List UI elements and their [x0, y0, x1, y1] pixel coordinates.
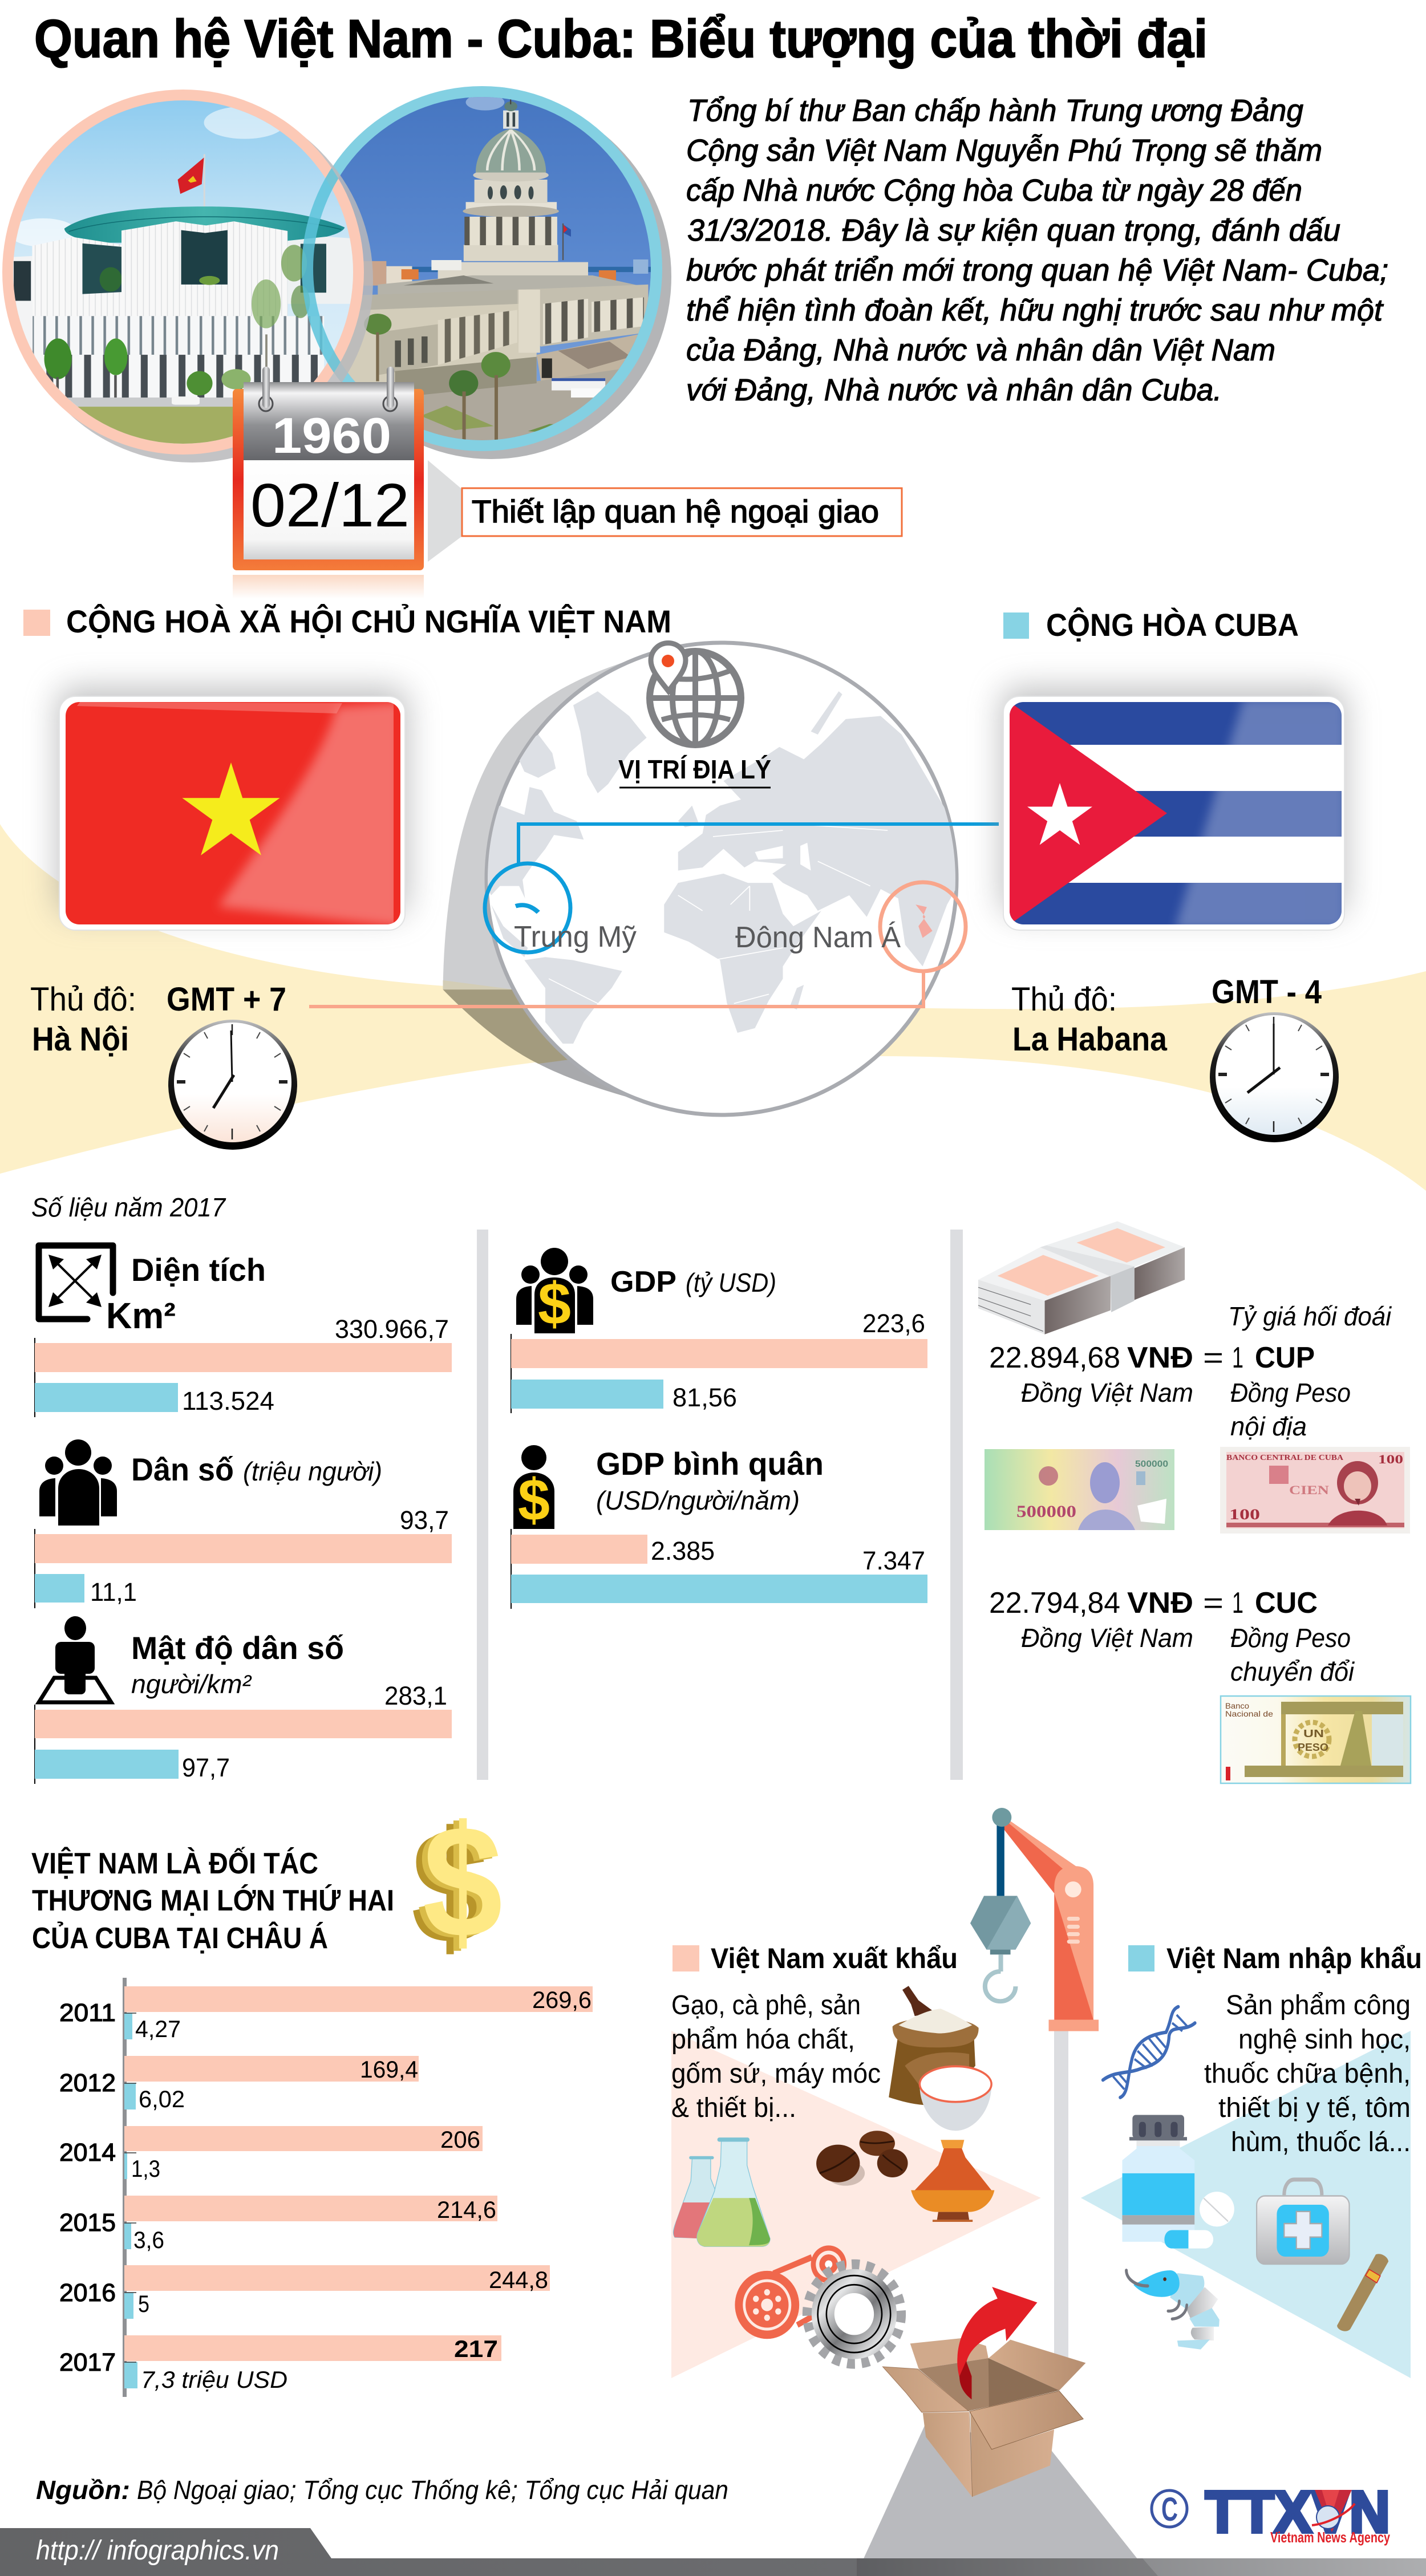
icon: rice sack [889, 1986, 979, 2106]
export text: Gạo, cà phê, sản [671, 1990, 861, 2021]
row 2016: 5 [138, 2290, 149, 2317]
icon: GDP person: $ [518, 1467, 550, 1534]
row 2015: 2015 [59, 2209, 116, 2237]
icon: gold dollar: $ [423, 1793, 503, 1971]
intro text: bước phát triển mới trong quan hệ Việt Nam- Cuba; [686, 253, 1388, 287]
panel: exchange rates [978, 1222, 1411, 1783]
row 2017: 7,3 triệu USD [141, 2366, 287, 2393]
rate: CUP: Đồng Peso [1230, 1378, 1351, 1407]
icon: GDP people: $ [538, 1271, 571, 1337]
intro text [686, 94, 1388, 407]
chart: population: 11,1 [90, 1577, 137, 1607]
chart: area: 330.966,7 [335, 1315, 449, 1344]
row 2015 [59, 2196, 497, 2253]
icon: medicine bottle [1122, 2115, 1194, 2242]
export text: gốm sứ, máy móc [671, 2059, 881, 2089]
chart: trade by year [59, 1978, 593, 2397]
banknote: Vietnam 500000: 500000 [1135, 1459, 1168, 1469]
icon: area [39, 1246, 113, 1319]
rate: CUP [989, 1341, 1351, 1441]
marker: Vietnam ring [880, 882, 966, 971]
row 2011: 4,27 [135, 2015, 181, 2042]
chart: area [35, 1246, 452, 1417]
row 2014 [59, 2126, 483, 2182]
Vietnam capital and time: Thủ đô: [30, 981, 136, 1018]
heading: trade partner [31, 1847, 394, 1955]
icon: pill [1200, 2192, 1234, 2226]
chart: density: 97,7 [182, 1753, 230, 1782]
intro text: 31/3/2018. Đây là sự kiện quan trọng, đánh dấu [687, 213, 1340, 248]
source: Bộ Ngoại giao; Tổng cục Thống kê; Tổng cục Hải quan [137, 2475, 728, 2505]
row 2017: 2017 [59, 2348, 116, 2376]
banknote: Cuba 1 peso convertible: Banco [1225, 1701, 1249, 1710]
rate: CUC: VNĐ [1127, 1587, 1193, 1620]
label: Southeast Asia: Đông Nam Á [735, 921, 901, 954]
icon: first aid kit [1257, 2180, 1350, 2264]
import text [1204, 1990, 1411, 2157]
chart: population: Dân số [131, 1451, 234, 1487]
rate: CUP: nội địa [1230, 1411, 1307, 1441]
logo: TTXVN: C [1161, 2491, 1178, 2528]
chart: GDP: GDP [610, 1265, 676, 1299]
export text: phẩm hóa chất, [671, 2025, 855, 2055]
divider [477, 1230, 488, 1780]
icon: clock Hanoi [168, 1020, 297, 1150]
chart: GDP per capita: (USD/người/năm) [596, 1486, 800, 1515]
cream band background [0, 824, 1426, 1191]
export text [671, 1990, 881, 2123]
connector: Vietnam [309, 971, 923, 1007]
Cuba capital and time: Thủ đô: [1011, 981, 1117, 1018]
crane pole [1054, 2031, 1068, 2362]
icon: GDP person [513, 1445, 554, 1534]
rate: CUP: CUP [1255, 1341, 1315, 1374]
circle: Vietnam National Assembly photo [2, 90, 373, 463]
heading: trade partner: THƯƠNG MẠI LỚN THỨ HAI [32, 1884, 394, 1917]
export triangle [671, 2031, 1041, 2378]
icon: lobster [1127, 2270, 1220, 2350]
intro text: cấp Nhà nước Cộng hòa Cuba từ ngày 28 đến [686, 173, 1302, 208]
flag: Vietnam [57, 687, 408, 930]
chart: density [35, 1616, 452, 1784]
banknote: Vietnam 500000: 500000 [1016, 1502, 1076, 1521]
intro text: của Đảng, Nhà nước và nhân dân Việt Nam [686, 333, 1275, 367]
chart: density: Mật độ dân số [131, 1630, 344, 1666]
Cuba capital and time: GMT - 4 [1212, 973, 1322, 1011]
import icons [1103, 2007, 1388, 2350]
icon: flasks [674, 2137, 770, 2246]
heading: trade partner: CỦA CUBA TẠI CHÂU Á [32, 1921, 328, 1955]
heading: trade partner: VIỆT NAM LÀ ĐỐI TÁC [31, 1847, 318, 1880]
legend: export: Việt Nam xuất khẩu [711, 1942, 958, 1974]
import text: hùm, thuốc lá... [1231, 2127, 1411, 2157]
icon: pulleys and gear [735, 2245, 901, 2364]
import text: thiết bị y tế, tôm [1218, 2093, 1411, 2123]
row 2012: 6,02 [139, 2086, 185, 2112]
rate: CUC: chuyển đổi [1230, 1657, 1355, 1686]
Cuba capital and time: La Habana [1012, 1021, 1168, 1058]
date: 02/12 [250, 470, 410, 539]
logo: TTXVN: Vietnam News Agency [1270, 2529, 1390, 2546]
rate: CUC: 22.794,84 [989, 1587, 1120, 1620]
row 2016 [59, 2265, 550, 2319]
globe map panel [443, 643, 966, 1115]
export text: & thiết bị... [671, 2093, 796, 2123]
icon: globe with pin [650, 643, 741, 745]
flag: Cuba [1001, 687, 1346, 930]
icon: money stack [978, 1222, 1185, 1334]
import triangle [1081, 2031, 1411, 2378]
icon: clock Havana [1210, 1012, 1339, 1142]
banknote: Cuba 100 pesos: CIEN [1289, 1483, 1329, 1497]
import text: thuốc chữa bệnh, [1204, 2059, 1411, 2089]
icon: DNA [1103, 2007, 1195, 2098]
chart: GDP: 81,56 [673, 1383, 737, 1412]
icon: density [39, 1616, 111, 1702]
source: Nguồn: [36, 2475, 130, 2505]
row 2016: 2016 [59, 2279, 116, 2307]
calendar 1960 02/12 [233, 367, 424, 599]
icon: crane [970, 1808, 1099, 2031]
banknote: Cuba 100 pesos [1220, 1447, 1410, 1534]
rate: CUC: Đồng Việt Nam [1021, 1623, 1193, 1653]
icon: ceramic tagine [911, 2140, 994, 2222]
rate: CUC: 1 [1232, 1587, 1243, 1620]
banknote: Vietnam 500000 [985, 1449, 1174, 1530]
callout: diplomatic relations [428, 460, 902, 562]
year: 1960 [272, 407, 391, 464]
icon: cigar [1337, 2254, 1388, 2331]
icon: GDP people [516, 1248, 593, 1337]
chart: density: người/km² [131, 1669, 252, 1699]
Vietnam capital and time: Hà Nội [32, 1021, 129, 1058]
chart: area: Km² [106, 1295, 176, 1336]
import text: Sản phẩm công [1226, 1990, 1411, 2021]
connector: Cuba [518, 824, 999, 864]
banknote: Cuba 100 pesos: 100 [1229, 1506, 1260, 1523]
row 2014: 2014 [59, 2139, 116, 2167]
export icons [674, 1986, 994, 2364]
chart: population: (triệu người) [243, 1457, 382, 1486]
logo: TTXVN: TTXVN [1205, 2479, 1390, 2545]
row 2015: 3,6 [133, 2226, 164, 2253]
marker: Cuba ring [485, 863, 570, 952]
callout: diplomatic relations: Thiết lập quan hệ ngoại giao [472, 493, 879, 529]
row 2012: 169,4 [360, 2056, 418, 2083]
heading: Vietnam: CỘNG HOÀ XÃ HỘI CHỦ NGHĨA VIỆT NAM [66, 603, 671, 639]
row 2012 [59, 2056, 419, 2112]
icon: gold dollar: $ [411, 1799, 488, 1977]
heading: Cuba: CỘNG HÒA CUBA [1046, 607, 1299, 643]
rate: CUC [989, 1587, 1355, 1686]
circle: Cuba capitol photo [332, 86, 671, 459]
banknote: Cuba 1 peso convertible: UN [1303, 1728, 1324, 1739]
rate: CUC: = [1203, 1587, 1224, 1620]
intro text: thể hiện tình đoàn kết, hữu nghị trước sau như một [686, 293, 1384, 327]
footer bar: http:// infographics.vn [36, 2536, 279, 2566]
row 2015: 214,6 [437, 2196, 496, 2223]
rate: CUP: 1 [1232, 1341, 1243, 1374]
panel: exchange rates: Tỷ giá hối đoái [1228, 1301, 1392, 1331]
banknote: Cuba 1 peso convertible: PESO [1298, 1742, 1328, 1753]
chart: GDP: (tỷ USD) [686, 1268, 776, 1297]
rate: CUP: = [1203, 1341, 1224, 1374]
chart: GDP: 223,6 [862, 1309, 925, 1338]
intro text: Cộng sản Việt Nam Nguyễn Phú Trọng sẽ thăm [686, 133, 1322, 168]
rate: CUP: 22.894,68 [989, 1341, 1120, 1374]
chart: GDP per capita [511, 1445, 927, 1609]
row 2014: 206 [440, 2126, 480, 2153]
chart: area: 113.524 [182, 1386, 274, 1415]
chart: GDP per capita: 7.347 [862, 1546, 925, 1575]
chart: population: 93,7 [400, 1506, 449, 1535]
chart: area: Diện tích [131, 1252, 266, 1288]
divider [950, 1230, 963, 1780]
icon: capsule [1164, 2230, 1213, 2249]
row 2011 [59, 1986, 593, 2042]
intro text: với Đảng, Nhà nước và nhân dân Cuba. [686, 373, 1222, 407]
chart: population [35, 1439, 452, 1608]
label: Central America: Trung Mỹ [514, 920, 637, 954]
rate: CUP: VNĐ [1127, 1341, 1193, 1374]
Vietnam capital and time: GMT + 7 [167, 981, 286, 1018]
row 2016: 244,8 [489, 2266, 548, 2293]
icon: people [39, 1439, 117, 1526]
panel: building photos [0, 80, 687, 468]
icon: cardboard box with arrow [882, 2287, 1085, 2497]
chart: GDP per capita: GDP bình quân [596, 1446, 824, 1482]
rate: CUC: CUC [1255, 1587, 1318, 1620]
row 2011: 269,6 [532, 1986, 592, 2013]
banknote: Cuba 100 pesos: BANCO CENTRAL DE CUBA [1226, 1454, 1344, 1462]
icon: gold dollar: $ [417, 1795, 497, 1973]
title: Quan hệ Việt Nam - Cuba: Biểu tượng của thời đại [34, 9, 1208, 68]
Vietnam capital and time [30, 981, 297, 1150]
row 2011: 2011 [59, 1999, 116, 2027]
chart: GDP per capita: 2.385 [651, 1536, 715, 1565]
label: location: VỊ TRÍ ĐỊA LÝ [618, 754, 771, 784]
banknote: Cuba 1 peso convertible [1221, 1696, 1411, 1783]
row 2014: 1,3 [131, 2155, 160, 2182]
ring overlap [302, 168, 341, 373]
globe shadow crescent [443, 654, 699, 1115]
Cuba capital and time [1011, 973, 1339, 1142]
base trapezoid [856, 2423, 1151, 2576]
note: data year: Số liệu năm 2017 [31, 1192, 226, 1222]
row 2012: 2012 [59, 2069, 116, 2097]
intro text: Tổng bí thư Ban chấp hành Trung ương Đảng [687, 94, 1303, 128]
chart: density: 283,1 [384, 1681, 447, 1710]
footer bar [0, 2528, 1426, 2576]
row 2017 [59, 2335, 501, 2393]
banknote: Cuba 100 pesos: 100 [1378, 1452, 1403, 1466]
chart: GDP [511, 1248, 927, 1413]
world map [486, 691, 958, 1044]
icon: rice bowl [919, 2066, 991, 2131]
row 2017: 217 [454, 2335, 498, 2362]
import text: nghệ sinh học, [1238, 2025, 1411, 2055]
banknote: Cuba 1 peso convertible: Nacional de [1225, 1709, 1273, 1718]
icon: coffee beans [816, 2131, 908, 2186]
rate: CUP: Đồng Việt Nam [1021, 1378, 1193, 1407]
rate: CUC: Đồng Peso [1230, 1623, 1351, 1653]
